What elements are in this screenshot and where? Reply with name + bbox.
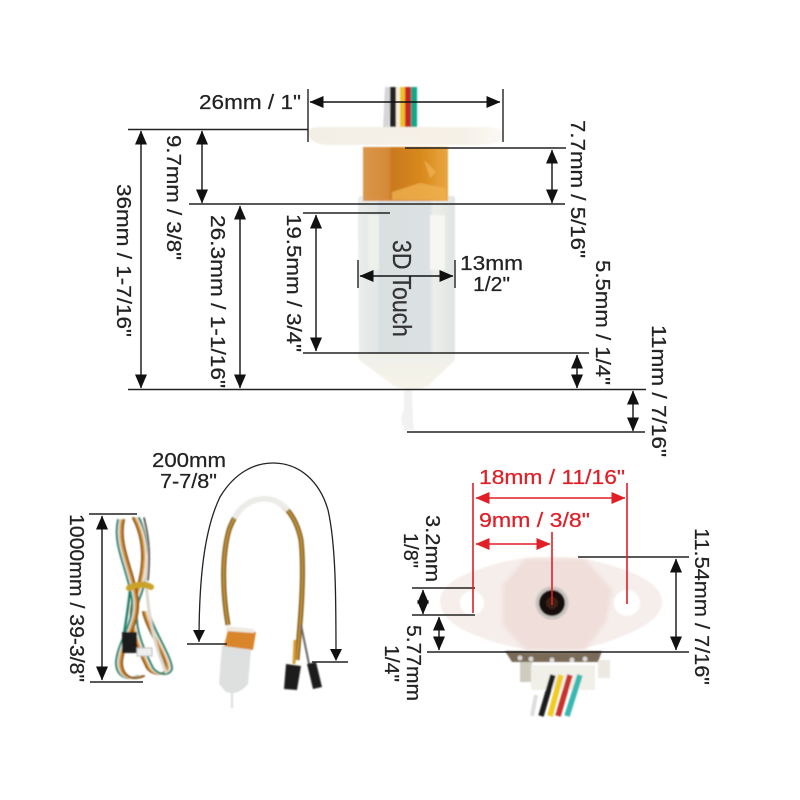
dimension: edge offset 5.77mm: 1/4" — [380, 645, 403, 682]
body windows — [368, 215, 445, 270]
mounting plate — [308, 127, 503, 145]
dimension: half spacing 9mm: 9mm / 3/8" — [479, 509, 590, 532]
orange kapton wrap — [363, 147, 448, 201]
dimension: 5.5mm: 5.5mm / 1/4" — [591, 260, 614, 385]
dimension: body width 13mm: 13mm — [460, 252, 523, 275]
dimension: hole spacing 18mm — [473, 466, 627, 613]
yellow cable tie — [129, 585, 151, 588]
probe body — [358, 196, 455, 389]
dimension: hole diameter 3.2mm: 1/8" — [399, 533, 422, 568]
dimension: hole spacing 18mm: 18mm / 11/16" — [479, 466, 625, 489]
black dupont plug on bundle — [122, 632, 137, 653]
photo: 3D Touch sensor, side view — [308, 87, 503, 430]
dimension: body width 13mm — [358, 252, 523, 296]
dimension: sensor disc width 26mm — [199, 89, 503, 142]
dimension: cable length 1000mm — [65, 514, 143, 682]
dimension: hole diameter 3.2mm: 3.2mm — [421, 515, 444, 582]
dimension lines: horizontal references — [128, 130, 646, 432]
label on sensor: 3D Touch: 3D Touch — [387, 240, 417, 337]
JST connector board — [505, 651, 610, 716]
dimension: 5.5mm — [577, 260, 614, 388]
plate — [440, 557, 662, 651]
mini sensor body — [219, 645, 251, 693]
dimension: lead length 200mm: 7-7/8" — [160, 470, 217, 493]
mounting holes — [460, 590, 640, 616]
dimension: 9.7mm — [162, 131, 202, 260]
plate centre shading — [503, 559, 612, 650]
dimension: cable length 1000mm: 1000mm / 39-3/8" — [65, 514, 88, 682]
dimension: body width 13mm: 1/2" — [473, 273, 510, 296]
kapton wrinkles — [392, 160, 446, 200]
dimension: 7.7mm — [552, 120, 589, 258]
dimension: 9.7mm: 9.7mm / 3/8" — [162, 135, 185, 260]
mini sensor orange wrap — [224, 630, 256, 650]
dimension: 19.5mm — [282, 214, 316, 352]
photo: sensor with 200mm ribbon lead — [219, 499, 322, 708]
dimension: 7.7mm: 7.7mm / 5/16" — [566, 120, 589, 258]
dimension: 11mm — [633, 325, 670, 457]
dimension: lead length 200mm: 200mm — [152, 449, 226, 472]
dimension: total height 36mm: 36mm / 1-7/16" — [112, 184, 135, 337]
centre bore — [536, 586, 568, 620]
dimension: 19.5mm: 19.5mm / 3/4" — [282, 214, 305, 352]
probe pin — [401, 390, 414, 430]
dimension: edge offset 5.77mm: 5.77mm — [402, 625, 425, 701]
sensor wires — [383, 87, 417, 129]
dimension: 26.3mm: 26.3mm / 1-1/16" — [206, 215, 229, 388]
black dupont connector, single — [307, 662, 322, 689]
dimension: hole diameter 3.2mm — [399, 515, 444, 614]
dimension: plate height 11.54mm: 11.54mm / 7/16" — [690, 528, 713, 685]
probe tip — [358, 353, 455, 389]
dimension: 11mm: 11mm / 7/16" — [647, 325, 670, 457]
dimension: half spacing 9mm — [476, 509, 590, 605]
photo: coiled 1000mm cable bundle — [116, 518, 172, 678]
black dupont connector, triple — [284, 664, 301, 690]
mini sensor pin — [231, 692, 233, 708]
dimension: edge offset 5.77mm — [380, 617, 439, 701]
photo: sensor top view, mounting plate — [440, 557, 662, 716]
dimension lines: plate references — [412, 557, 689, 652]
white JST plug on bundle — [137, 648, 152, 656]
dimension: lead length 200mm — [152, 449, 348, 662]
dimension: sensor disc width 26mm: 26mm / 1" — [199, 91, 301, 114]
